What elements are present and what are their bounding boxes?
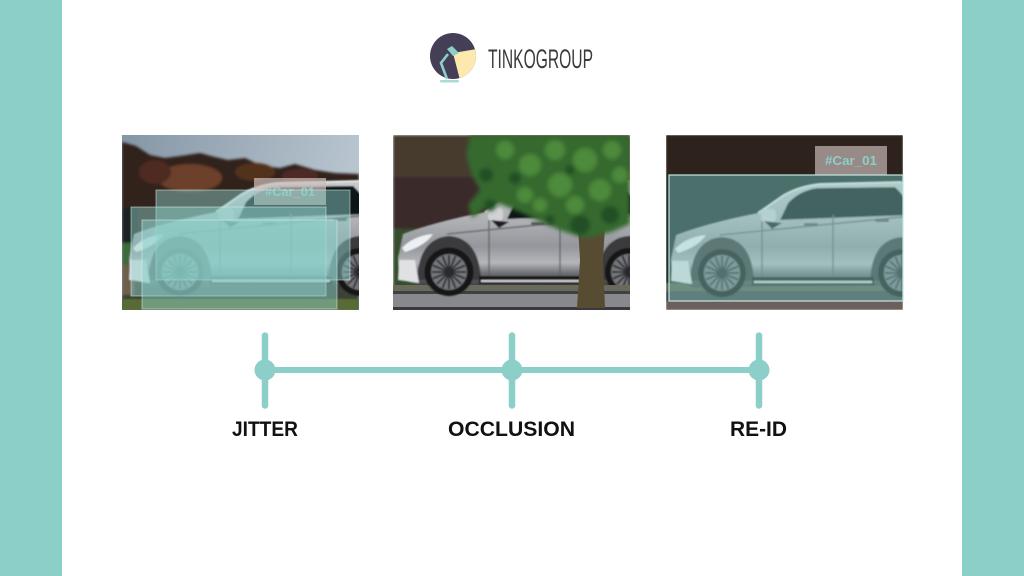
background hedge xyxy=(393,135,630,285)
car front wheel foreground xyxy=(425,248,473,296)
car photo with sky and trees xyxy=(122,135,359,310)
marker: occlusion xyxy=(502,336,522,406)
tree trunk xyxy=(577,226,605,308)
label: jitter: JITTER xyxy=(232,417,298,441)
marker: jitter xyxy=(254,336,276,406)
timeline xyxy=(254,336,770,406)
label: occlusion: OCCLUSION xyxy=(448,417,575,441)
car photo with hedge xyxy=(666,135,903,310)
ID label: #Car_01 xyxy=(815,146,887,175)
ID label: faint tag: #Car_01 xyxy=(265,184,315,199)
silver car xyxy=(397,180,630,285)
label: re-id: RE-ID xyxy=(730,417,787,441)
marker: re-id xyxy=(748,336,770,406)
road xyxy=(393,285,630,310)
tracked bounding box xyxy=(669,175,903,301)
jittered bounding box 2 xyxy=(131,207,326,296)
timeline axis xyxy=(265,367,759,373)
jittered bounding box 1 xyxy=(156,190,350,280)
right side band xyxy=(962,0,1024,576)
icon: desk lamp in circle xyxy=(430,33,477,82)
tree foliage xyxy=(466,135,630,238)
logo: Tinkogroup xyxy=(430,33,593,82)
logo wordmark: TINKOGROUP xyxy=(488,44,593,74)
ID label: faint tag xyxy=(254,178,326,205)
photo panel: jitter xyxy=(122,135,359,310)
ID label: #Car_01: #Car_01 xyxy=(825,153,877,168)
jittered bounding box 3 xyxy=(142,220,337,309)
photo panel: re-id xyxy=(666,135,904,310)
left side band xyxy=(0,0,62,576)
photo panel: occlusion xyxy=(393,135,630,310)
